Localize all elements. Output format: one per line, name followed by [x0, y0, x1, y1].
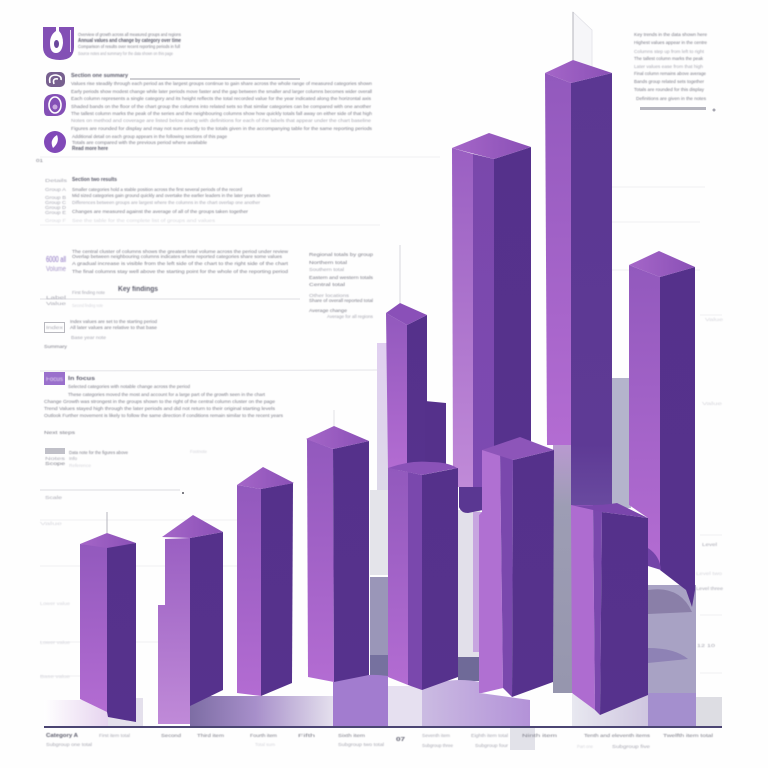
text block: top right: The tallest column marks the peak — [634, 56, 704, 61]
text block: section two: Details — [45, 178, 68, 183]
x axis labels: Eighth item total — [471, 733, 508, 738]
bar 5 back centre — [386, 245, 446, 470]
icon: logo with drop — [43, 27, 74, 60]
text block: section three: A gradual increase is visible from the left side of the chart to the right side of the chart — [72, 261, 289, 266]
text block: right column middle: Share of overall reported total — [309, 298, 373, 303]
bar 7 tall — [545, 60, 612, 510]
text block: section two — [45, 177, 270, 223]
text block: top right — [634, 32, 716, 112]
x axis labels: Subgroup three — [422, 743, 453, 748]
text block: section three: 6000 all — [46, 255, 66, 264]
text block: section one: Additional detail on each group appears in the following sections of this page — [72, 134, 227, 139]
panel: highlighted section: In focus — [68, 376, 95, 382]
text block: lower notes: Info — [69, 456, 77, 461]
faint axis labels right: Value — [702, 401, 723, 406]
x axis labels: Total sum — [255, 742, 275, 747]
text block: section two: Group F — [45, 218, 66, 223]
text block: top right: Definitions are given in the notes — [636, 96, 707, 101]
bar 11 front right — [571, 503, 648, 715]
faint axis labels right: Level two — [696, 571, 723, 576]
faint axis labels right: Value — [705, 317, 724, 322]
x axis labels: Fourth item — [250, 733, 277, 738]
heading block: top — [78, 32, 182, 56]
text block: section one: Shaded bands on the floor of the chart group the columns into related sets so that similar categories can be compared with one another — [71, 104, 372, 109]
faint axis labels right — [696, 317, 724, 648]
text block: section one — [71, 73, 373, 152]
text block: section two: Section two results — [72, 177, 117, 183]
x axis labels: 07 — [396, 737, 405, 743]
pale strip beside bar 10 — [473, 512, 482, 652]
x axis labels: First item total — [99, 733, 130, 738]
text block: top right: Key trends in the data shown here — [634, 32, 707, 37]
faint axis labels left: Base value — [40, 674, 71, 679]
bar 6 — [452, 133, 531, 513]
heading block: top: Overview of growth across all measured groups and regions — [78, 32, 182, 37]
text block: section one: Values rise steadily through each period as the largest groups continue to gain share across the whole range of measured categories shown — [71, 81, 372, 86]
text block: section two: Group D — [45, 205, 67, 210]
text block: right column middle: Central total — [309, 282, 345, 287]
text block: lower notes: Notes — [45, 456, 66, 461]
text block: section three: Key findings — [118, 286, 158, 293]
text block: right column middle — [309, 252, 374, 319]
text block: lower notes — [45, 448, 207, 500]
text block: section two: Smaller categories hold a stable position across the first several periods of the record — [72, 187, 242, 192]
panel: highlighted section: Selected categories with notable change across the period — [68, 384, 190, 389]
bar 3 — [237, 467, 294, 696]
text block: right column middle: Regional totals by group — [309, 252, 374, 257]
backdrop blocks behind bars — [370, 343, 696, 727]
bar 9 front centre — [388, 462, 458, 690]
text block: section two: Group B — [45, 195, 66, 200]
text block: section two: Changes are measured against the average of all of the groups taken together — [72, 209, 249, 214]
bar 10 front — [479, 437, 554, 697]
text block: section four: Summary — [44, 344, 68, 349]
icon: leaf circle — [44, 131, 66, 153]
text block: lower notes: Reference — [69, 463, 91, 468]
text block: lower notes: Scale — [45, 495, 63, 500]
x axis labels: Part one — [577, 744, 593, 749]
baseline axis — [44, 726, 722, 728]
text block: section three: Volume — [46, 266, 66, 273]
text block: right column middle: Northern total — [309, 260, 347, 265]
text block: section one: Section one summary — [71, 73, 128, 79]
panel: highlighted section: Next steps — [44, 430, 76, 435]
x axis labels: Category A — [46, 733, 78, 739]
faint axis labels left: Lower value — [40, 601, 71, 606]
text block: section four — [44, 319, 157, 349]
panel: highlighted section: These categories moved the most and account for a large part of the growth seen in the chart — [68, 392, 266, 397]
text block: top right: Columns step up from left to right — [634, 49, 705, 54]
bar 8 right — [629, 251, 695, 607]
panel: highlighted section: Change Growth was strongest in the groups shown to the right of the central column cluster on the page — [44, 399, 275, 404]
text block: section two: Group A — [45, 187, 67, 192]
text block: section three: The central cluster of columns shows the greatest total volume across the period under review — [72, 249, 289, 254]
x axis labels: Sixth item — [338, 733, 365, 738]
text block: section one: Early periods show modest change while later periods move faster and the gap between the smaller and larger columns becomes wider overall — [71, 89, 372, 94]
text block: right column middle: Southern total — [309, 267, 344, 272]
faint axis labels left: Lower value — [40, 640, 71, 645]
text block: section two: Differences between groups are largest where the columns in the chart overlap one another — [72, 200, 260, 205]
panel: highlighted section — [44, 372, 284, 435]
text block: section two: See the table for the complete list of groups and values — [72, 218, 216, 223]
text block: right column middle: Other locations — [309, 293, 350, 298]
text block: section three: First finding note — [72, 290, 105, 295]
text block: top right: Totals are rounded for this display — [634, 87, 705, 92]
text block: section four: Base year note — [71, 335, 106, 340]
text block: section three: The final columns stay well above the starting point for the whole of the reporting period — [72, 269, 289, 274]
text block: section one: Notes on method and coverage are listed below along with definitions for each of the labels that appear under the chart baseline — [71, 118, 372, 123]
text block: section three: Second finding note — [72, 303, 103, 308]
text block: section two: Mid sized categories gain ground quickly and overtake the earlier leaders in the later years shown — [72, 193, 270, 198]
text block: top right: Later values ease from that high — [634, 64, 703, 69]
text block: right column middle: Eastern and western totals — [309, 275, 374, 280]
x axis labels: Twelfth item total — [663, 733, 713, 738]
text block: section three: Value — [46, 301, 67, 306]
text block: section three — [46, 249, 289, 308]
text block: top right: Bands group related sets together — [634, 79, 704, 84]
faint axis labels right: 12 10 — [697, 643, 716, 648]
floor bands — [44, 675, 722, 750]
text block: section one: The tallest column marks the peak of the series and the neighbouring columns show how quickly totals fall away on either side of that high — [71, 111, 372, 116]
x axis labels: Ninth item — [522, 733, 557, 738]
text block: section three: Overlap between neighbouring columns indicates where reported categories share some values — [72, 254, 283, 259]
text block: section one: Each column represents a single category and its height reflects the total recorded value for the year indicated along the horizontal axis — [71, 96, 372, 101]
text block: top right: Final column remains above average — [634, 71, 706, 76]
text block: section four: All later values are relative to that base — [70, 325, 157, 330]
spike and faint panel above tall bar — [573, 12, 592, 70]
x axis labels: Seventh item — [422, 733, 450, 738]
small marker: 01 — [36, 158, 44, 163]
x axis labels: Second — [161, 733, 182, 738]
text block: lower notes: Footnote — [190, 449, 207, 454]
x axis labels — [46, 733, 713, 749]
text block: right column middle: Average change — [309, 308, 348, 313]
text block: section one: Read more here — [72, 146, 108, 152]
icon: ring — [44, 94, 66, 116]
faint axis labels left: Value — [40, 521, 63, 526]
x axis labels: Subgroup one total — [46, 742, 92, 747]
x axis labels: Subgroup two total — [338, 742, 384, 747]
heading block: top: Comparison of results over recent reporting periods in full — [78, 44, 180, 49]
text block: section four: Index values are set to the starting period — [70, 319, 157, 324]
panel: highlighted section: Focus — [46, 377, 63, 383]
text block: section four: Index — [46, 325, 64, 330]
bar 4 — [306, 410, 369, 682]
text block: lower notes: Scope — [45, 461, 66, 466]
text block: lower notes: Data note for the figures above — [69, 450, 128, 455]
faint axis labels left — [40, 521, 71, 679]
text block: section two: Group E — [45, 210, 66, 215]
heading block: top: Annual values and change by category over time — [78, 38, 181, 44]
panel: highlighted section: Trend Values stayed high through the later periods and did not return to their original starting levels — [44, 406, 276, 411]
panel: highlighted section: Outlook Further movement is likely to follow the same direction if conditions remain similar to the recent years — [44, 413, 284, 418]
bar 2 — [158, 515, 223, 724]
x axis labels: Subgroup five — [612, 744, 651, 749]
faint axis labels right: Level — [702, 542, 717, 547]
icon: swirl — [46, 72, 65, 87]
text block: section one: Figures are rounded for display and may not sum exactly to the totals given in the accompanying table for the same reporting periods — [71, 126, 373, 131]
text block: section one: Totals are compared with the previous period where available — [72, 140, 207, 145]
faint axis labels right: Level three — [696, 586, 724, 591]
heading block: top: Source notes and summary for the data shown on this page — [78, 51, 173, 56]
text block: top right: Highest values appear in the centre — [634, 40, 707, 45]
text block: section two: Group C — [45, 200, 67, 205]
x axis labels: Fifth — [298, 733, 316, 738]
text block: right column middle: Average for all regions — [327, 314, 374, 319]
bar 1 — [80, 512, 136, 722]
x axis labels: Third item — [197, 733, 224, 738]
x axis labels: Subgroup four — [475, 743, 509, 748]
x axis labels: Tenth and eleventh items — [584, 733, 651, 738]
text block: section three: Label — [46, 295, 66, 300]
